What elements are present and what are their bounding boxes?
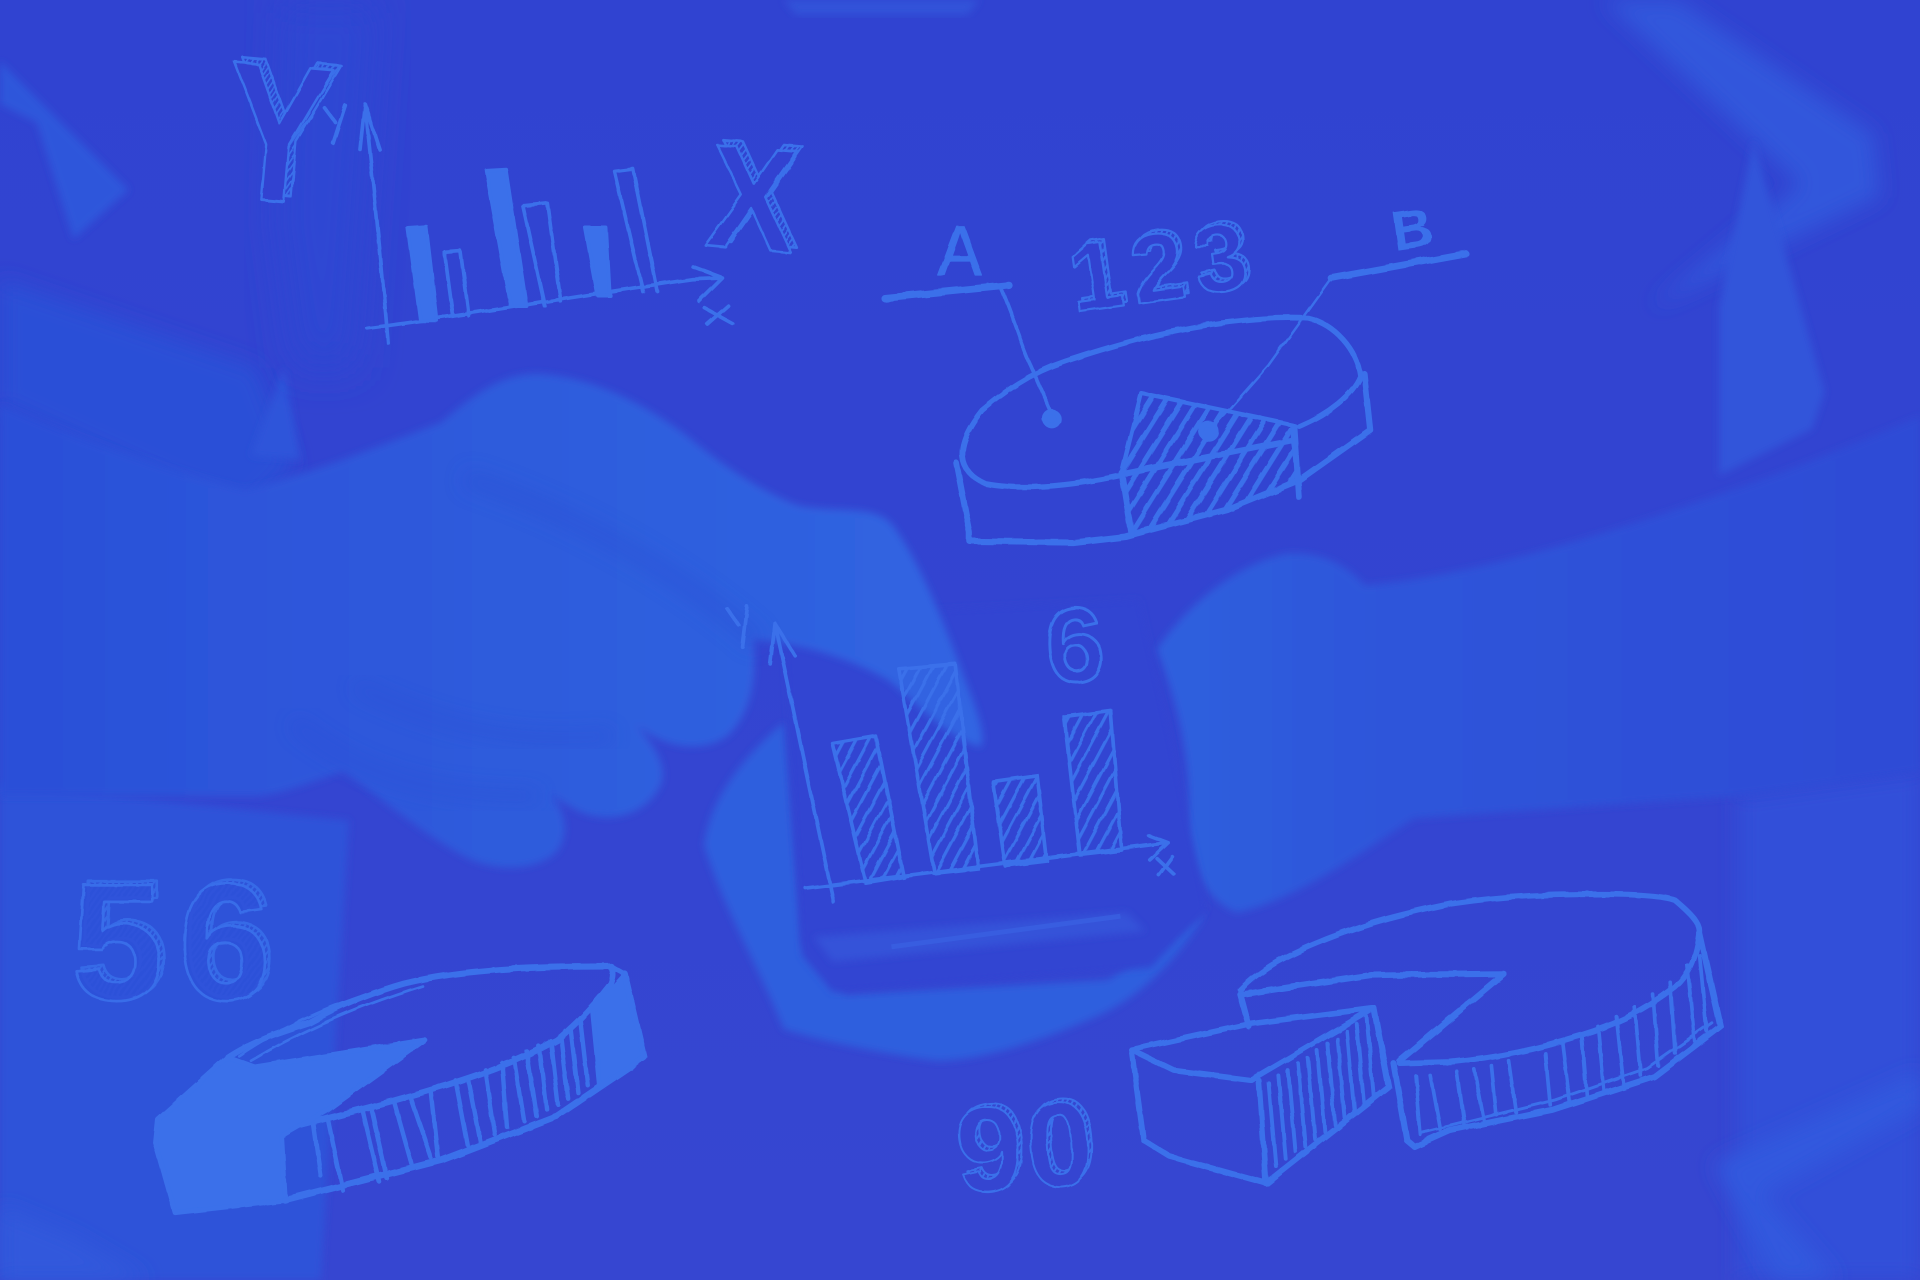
- number 123: 123: [1062, 202, 1264, 333]
- label A: A: [938, 213, 983, 292]
- label B: B: [1388, 195, 1437, 263]
- big letter Y: Y: [224, 14, 347, 242]
- sketch: bottom-right pie chart with detached slice: [1131, 894, 1720, 1183]
- number 123: 123: [1066, 198, 1267, 329]
- photo: smartphone: [784, 600, 1206, 992]
- photo: right forearm and thumb: [1157, 416, 1920, 913]
- big letter X: X: [701, 112, 804, 284]
- big letter X: X: [707, 107, 810, 279]
- sketch: top-right pie chart with A and B labels: [884, 254, 1466, 543]
- photo: lower palm holding the phone: [704, 723, 1206, 1061]
- number 90: 90: [955, 1072, 1105, 1215]
- number 90: 90: [951, 1075, 1101, 1219]
- number 56: 56: [76, 846, 291, 1032]
- sketch: top-left bar chart: [324, 104, 732, 343]
- big letter Y: Y: [217, 19, 340, 247]
- photo: left hand with pointing finger: [0, 374, 983, 867]
- sketch: bottom-left pie chart: [156, 966, 644, 1213]
- number 6 on phone: 6: [1042, 586, 1108, 706]
- sketch: central smartphone bar chart: [727, 606, 1173, 903]
- number 56: 56: [71, 849, 286, 1036]
